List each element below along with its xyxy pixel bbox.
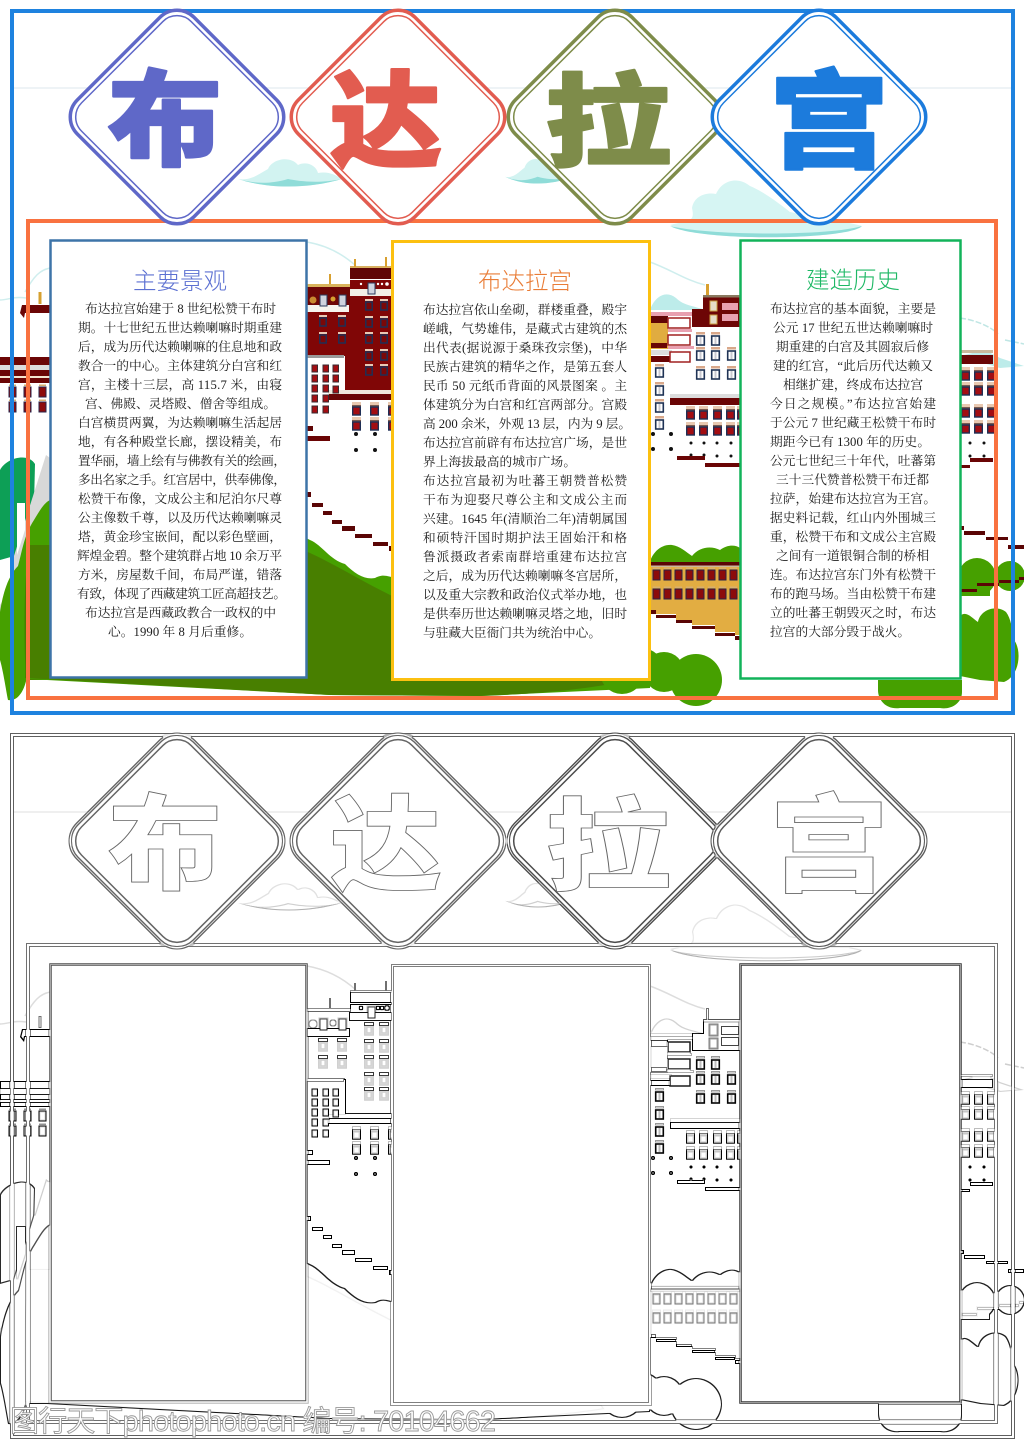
central hill behind the panels (25, 530, 650, 696)
text block: construction history: 相继扩建，终成布达拉宫 (783, 377, 923, 393)
text block: construction history: 布的跑马场。当由松赞干布建 (770, 586, 936, 601)
text block: main sights: 白宫横贯两翼，为达赖喇嘛生活起居 (78, 415, 282, 431)
gold building with green bushes (650, 545, 740, 640)
text block: main sights: 布达拉宫是西藏政教合一政权的中 (85, 605, 276, 620)
diamond badge three (498, 0, 732, 234)
text block: construction history: 今日之规模。”布达拉宫始建 (770, 396, 936, 411)
text block: Potala: 是供奉历世达赖喇嘛灵塔之地，旧时 (423, 606, 627, 622)
text block: Potala: 民族古建筑的精华之作，是第五套人 (423, 359, 627, 375)
outline title: 布达拉宫: 宫 (770, 787, 888, 906)
text block: Potala: 界上海拔最高的城市广场。 (423, 454, 576, 469)
text block: construction history (770, 301, 936, 639)
left green hillside and stairs (0, 455, 50, 700)
inner orange frame (28, 221, 996, 698)
text block: Potala: 布达拉宫依山垒砌，群楼重叠，殿宇 (423, 302, 627, 318)
text block: construction history: 公元七世纪三十年代，吐蕃第 (770, 453, 936, 469)
outline title: 布达拉宫 (108, 787, 888, 906)
clouds in the sky (0, 159, 1024, 368)
text block: construction history: 据史料记载，红山内外围城三 (770, 510, 936, 526)
text block: main sights: 宫，主楼十三层，高 115.7 米，由寝 (78, 377, 282, 393)
text block: construction history: 连。布达拉宫东门外有松赞干 (770, 567, 936, 582)
title: 布达拉宫: 布 (108, 64, 222, 180)
text block: Potala: 布达拉宫前辟有布达拉宫广场，是世 (423, 435, 627, 451)
text block: main sights: 教合一的中心。主体建筑分白宫和红 (78, 358, 282, 373)
right green bushes (878, 558, 1024, 708)
text block: main sights: 辉煌金碧。整个建筑群占地 10 余万平 (77, 548, 282, 563)
heading: construction history: 建造历史 (806, 267, 900, 293)
text block: construction history: 拉宫的大部分毁于战火。 (770, 624, 910, 639)
outline duplicate of the page (edge-filtered line art) (0, 714, 1024, 1448)
text block: construction history: 期重建的白宫及其圆寂后修 (776, 339, 929, 354)
outline title: 布达拉宫: 达 (330, 788, 442, 904)
text block: construction history: 期距今已有 1300 年的历史。 (770, 434, 930, 449)
green bushes below centre (600, 649, 722, 706)
text block: Potala: 民币 50 元纸币背面的风景图案 。主 (423, 378, 627, 393)
text block: main sights: 宫、佛殿、灵塔殿、僧舍等组成。 (85, 396, 276, 411)
illustrated page: background scene, frames, panels and diamond badges (0, 0, 1024, 730)
text block: Potala: 体建筑分为白宫和红宫两部分。宫殿 (423, 397, 627, 412)
text block: construction history: 拉萨，始建布达拉宫为王宫。 (770, 491, 936, 507)
diamond badge two (281, 0, 515, 234)
palace right section between panels two and three (650, 284, 746, 467)
text block: Potala: 以及重大宗教和政治仪式举办地，也 (423, 587, 627, 603)
heading: main sights: 主要景观 (133, 268, 227, 294)
horizon line (11, 87, 1013, 89)
left building wing (0, 292, 50, 412)
text block: main sights: 松赞干布像，文成公主和尼泊尔尺尊 (78, 491, 282, 507)
text block: main sights: 布达拉宫始建于 8 世纪松赞干布时 (85, 301, 276, 316)
title: 布达拉宫: 达 (330, 64, 442, 180)
title: 布达拉宫 (108, 63, 888, 182)
text block: Potala: 与驻藏大臣衙门共为统治中心。 (423, 625, 601, 640)
text block: Potala: 嵯峨，气势雄伟，是藏式古建筑的杰 (423, 321, 627, 337)
panel: main sights card (50, 240, 306, 678)
text block: Potala (423, 302, 631, 640)
text block: Potala: 兴建。1645 年(清顺治二年)清朝属国 (423, 511, 627, 526)
panel: Potala card (392, 242, 650, 680)
panel: history card (740, 240, 960, 678)
text block: Potala: 布达拉宫最初为吐蕃王朝赞普松赞 (423, 473, 627, 488)
text block: construction history: 布达拉宫的基本面貌，主要是 (770, 301, 936, 317)
text block: Potala: 之后，成为历代达赖喇嘛冬宫居所， (423, 568, 627, 584)
diamond badge four (702, 0, 936, 234)
text block: main sights: 多出名家之手。红宫居中，供奉佛像， (78, 472, 286, 488)
text block: main sights: 公主像数千尊，以及历代达赖喇嘛灵 (78, 510, 282, 526)
text block: construction history: 三十三代赞普松赞干布迁都 (776, 472, 929, 487)
watermark: 图行天下photophoto.cn 编号: 70104662 (10, 1405, 496, 1438)
outline title: 布达拉宫: 拉 (545, 792, 671, 904)
text block: main sights: 后，成为历代达赖喇嘛的住息地和政 (78, 339, 282, 355)
diamond badge one (60, 0, 294, 234)
title: 布达拉宫: 拉 (545, 68, 671, 180)
text block: construction history: 建的红宫，“此后历代达赖又 (773, 358, 933, 374)
text block: construction history: 公元 17 世纪五世达赖喇嘛时 (773, 320, 933, 335)
text block: construction history: 之间有一道银铜合制的桥相 (776, 548, 929, 563)
text block: construction history: 于公元 7 世纪藏王松赞干布时 (770, 415, 936, 430)
text block: construction history: 重，松赞干布和文成公主宫殿 (770, 529, 936, 545)
text block: Potala: 和硕特汗国时期护法王固始汗和格 (423, 530, 627, 545)
text block: main sights: 塔，黄金珍宝嵌间，配以彩色壁画， (78, 529, 282, 545)
text block: Potala: 高 200 余米，外观 13 层，内为 9 层。 (423, 416, 631, 432)
text block: Potala: 干布为迎娶尺尊公主和文成公主而 (423, 492, 627, 507)
text block: main sights: 心。1990 年 8 月后重修。 (108, 624, 252, 639)
text block: main sights: 置华丽，墙上绘有与佛教有关的绘画， (78, 453, 286, 469)
outline title: 布达拉宫: 布 (108, 788, 222, 904)
outer blue frame (12, 11, 1013, 713)
heading: Potala: 布达拉宫 (478, 268, 572, 294)
palace right edge beyond panel three (960, 350, 1024, 549)
palace left section between panels one and two (307, 257, 397, 452)
text block: main sights: 方米，房屋数千间，布局严谨，错落 (78, 567, 282, 583)
text block: main sights: 期。十七世纪五世达赖喇嘛时期重建 (78, 320, 282, 335)
text block: Potala: 出代表(据说源于桑珠孜宗堡)，中华 (423, 340, 627, 356)
text block: main sights: 有致，体现了西藏建筑工匠高超技艺。 (77, 586, 286, 602)
text block: main sights (77, 301, 286, 639)
left staircase wall (307, 492, 392, 551)
text block: construction history: 立的吐蕃王朝毁灭之时，布达 (770, 605, 936, 621)
text block: Potala: 鲁派摄政者索南群培重建布达拉宫 (423, 549, 627, 564)
steps over the right bushes (960, 577, 1024, 592)
title: 布达拉宫: 宫 (770, 63, 888, 182)
text block: main sights: 地，有各种殿堂长廊，摆设精美，布 (78, 434, 282, 450)
